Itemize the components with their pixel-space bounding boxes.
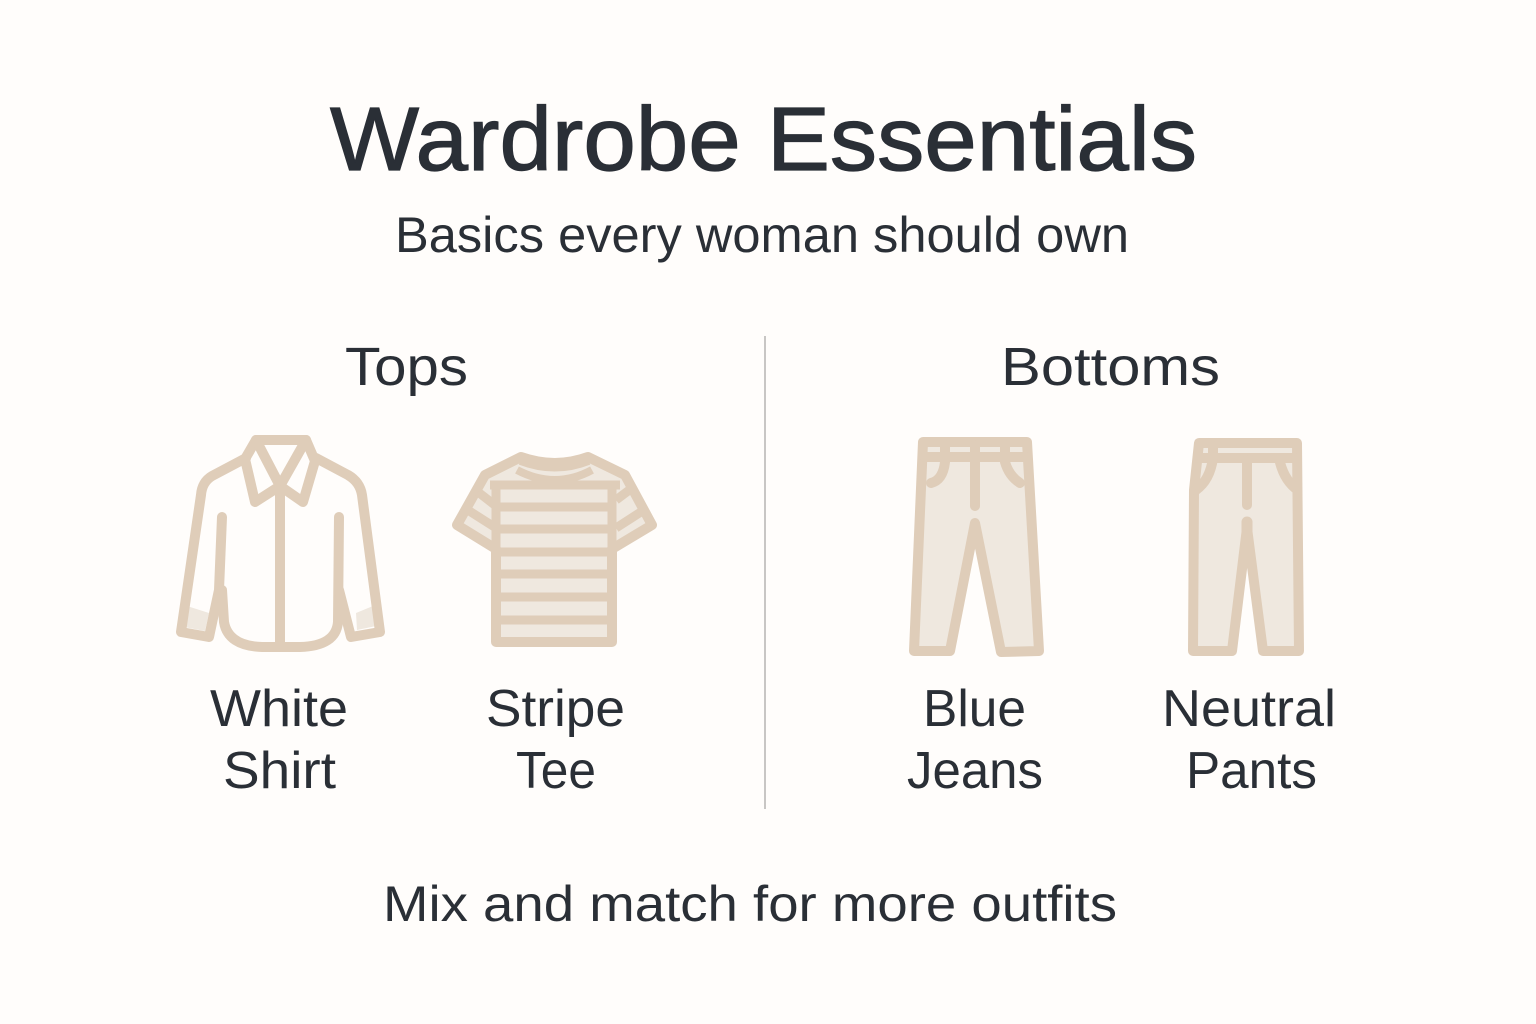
footer note: Mix and match for more outfits	[383, 876, 1117, 932]
subtitle: Basics every woman should own	[395, 207, 1129, 263]
heading: bottoms: Bottoms	[1001, 337, 1220, 397]
label: neutral pants: Neutral	[1162, 680, 1336, 738]
title: Wardrobe Essentials	[330, 90, 1197, 190]
label: white shirt	[210, 680, 348, 800]
label: white shirt: White	[210, 680, 348, 738]
label: stripe tee: Stripe	[486, 680, 625, 738]
label: stripe tee: Tee	[516, 742, 596, 800]
label: neutral pants	[1162, 680, 1336, 800]
label: blue jeans	[907, 680, 1043, 800]
heading: tops: Tops	[345, 337, 468, 397]
label: blue jeans: Jeans	[907, 742, 1043, 800]
icon: white shirt	[181, 440, 380, 647]
icon: neutral pants	[1193, 443, 1299, 651]
label: blue jeans: Blue	[923, 680, 1026, 738]
label: stripe tee	[486, 680, 625, 800]
icon: stripe tee	[457, 457, 652, 642]
label: neutral pants: Pants	[1186, 742, 1317, 800]
label: white shirt: Shirt	[223, 742, 337, 800]
icon: blue jeans	[914, 442, 1039, 652]
